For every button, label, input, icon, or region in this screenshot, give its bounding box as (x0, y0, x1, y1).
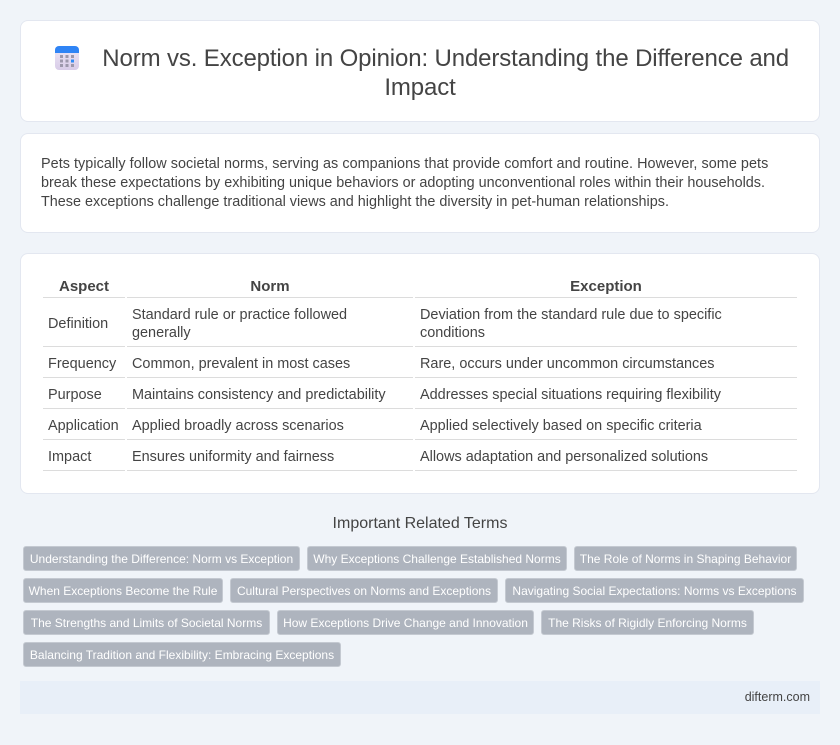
panel: title card (20, 20, 820, 122)
comparison table: Ensures uniformity and fairness (132, 449, 334, 465)
panel: intro (20, 133, 820, 233)
title: Norm vs. Exception in Opinion: Understanding the Difference and (102, 45, 789, 72)
related term tags: When Exceptions Become the Rule (29, 584, 217, 598)
title: Impact (384, 74, 456, 101)
related term tags: Cultural Perspectives on Norms and Exceptions (237, 584, 491, 598)
related term tags: The Role of Norms in Shaping Behavior (580, 552, 791, 566)
intro text: These exceptions challenge traditional views and highlight the diversity in pet-human relationships. (41, 194, 669, 210)
comparison table: Exception (570, 278, 642, 295)
comparison table: Application (48, 418, 119, 434)
comparison table: conditions (420, 325, 485, 341)
comparison table: Applied broadly across scenarios (132, 418, 344, 434)
footer bar (20, 681, 820, 714)
intro text (41, 156, 768, 210)
related term tags: Understanding the Difference: Norm vs Exception (30, 552, 293, 566)
related term tags: Balancing Tradition and Flexibility: Embracing Exceptions (30, 648, 334, 662)
comparison table: Definition (48, 316, 108, 332)
icon: calendar (55, 46, 79, 70)
comparison table: Frequency (48, 356, 116, 372)
comparison table: Allows adaptation and personalized solutions (420, 449, 708, 465)
related term tags: The Strengths and Limits of Societal Norms (31, 616, 262, 630)
heading: related terms: Important Related Terms (333, 515, 507, 532)
comparison table: Standard rule or practice followed (132, 307, 347, 323)
comparison table: generally (132, 325, 191, 341)
comparison table: Addresses special situations requiring flexibility (420, 387, 721, 403)
comparison table: Common, prevalent in most cases (132, 356, 350, 372)
comparison table: Rare, occurs under uncommon circumstances (420, 356, 714, 372)
related term tags: Navigating Social Expectations: Norms vs Exceptions (512, 584, 797, 598)
related term tags (23, 546, 804, 667)
title (102, 45, 789, 101)
panel: comparison table (20, 253, 820, 494)
comparison table: Maintains consistency and predictability (132, 387, 386, 403)
related term tags: How Exceptions Drive Change and Innovation (283, 616, 528, 630)
intro text: Pets typically follow societal norms, serving as companions that provide comfort and routine. However, some pets (41, 156, 768, 172)
comparison table: Norm (250, 278, 290, 295)
comparison table (43, 278, 797, 471)
related term tags: The Risks of Rigidly Enforcing Norms (548, 616, 747, 630)
comparison table: Aspect (59, 278, 109, 295)
intro text: break these expectations by exhibiting unique behaviors or adopting unconventional roles within their households. (41, 175, 765, 191)
related term tags: Why Exceptions Challenge Established Norms (313, 552, 561, 566)
footer text: difterm.com (745, 690, 810, 704)
comparison table: Purpose (48, 387, 102, 403)
comparison table: Applied selectively based on specific criteria (420, 418, 702, 434)
comparison table: Impact (48, 449, 91, 465)
comparison table: Deviation from the standard rule due to specific (420, 307, 722, 323)
